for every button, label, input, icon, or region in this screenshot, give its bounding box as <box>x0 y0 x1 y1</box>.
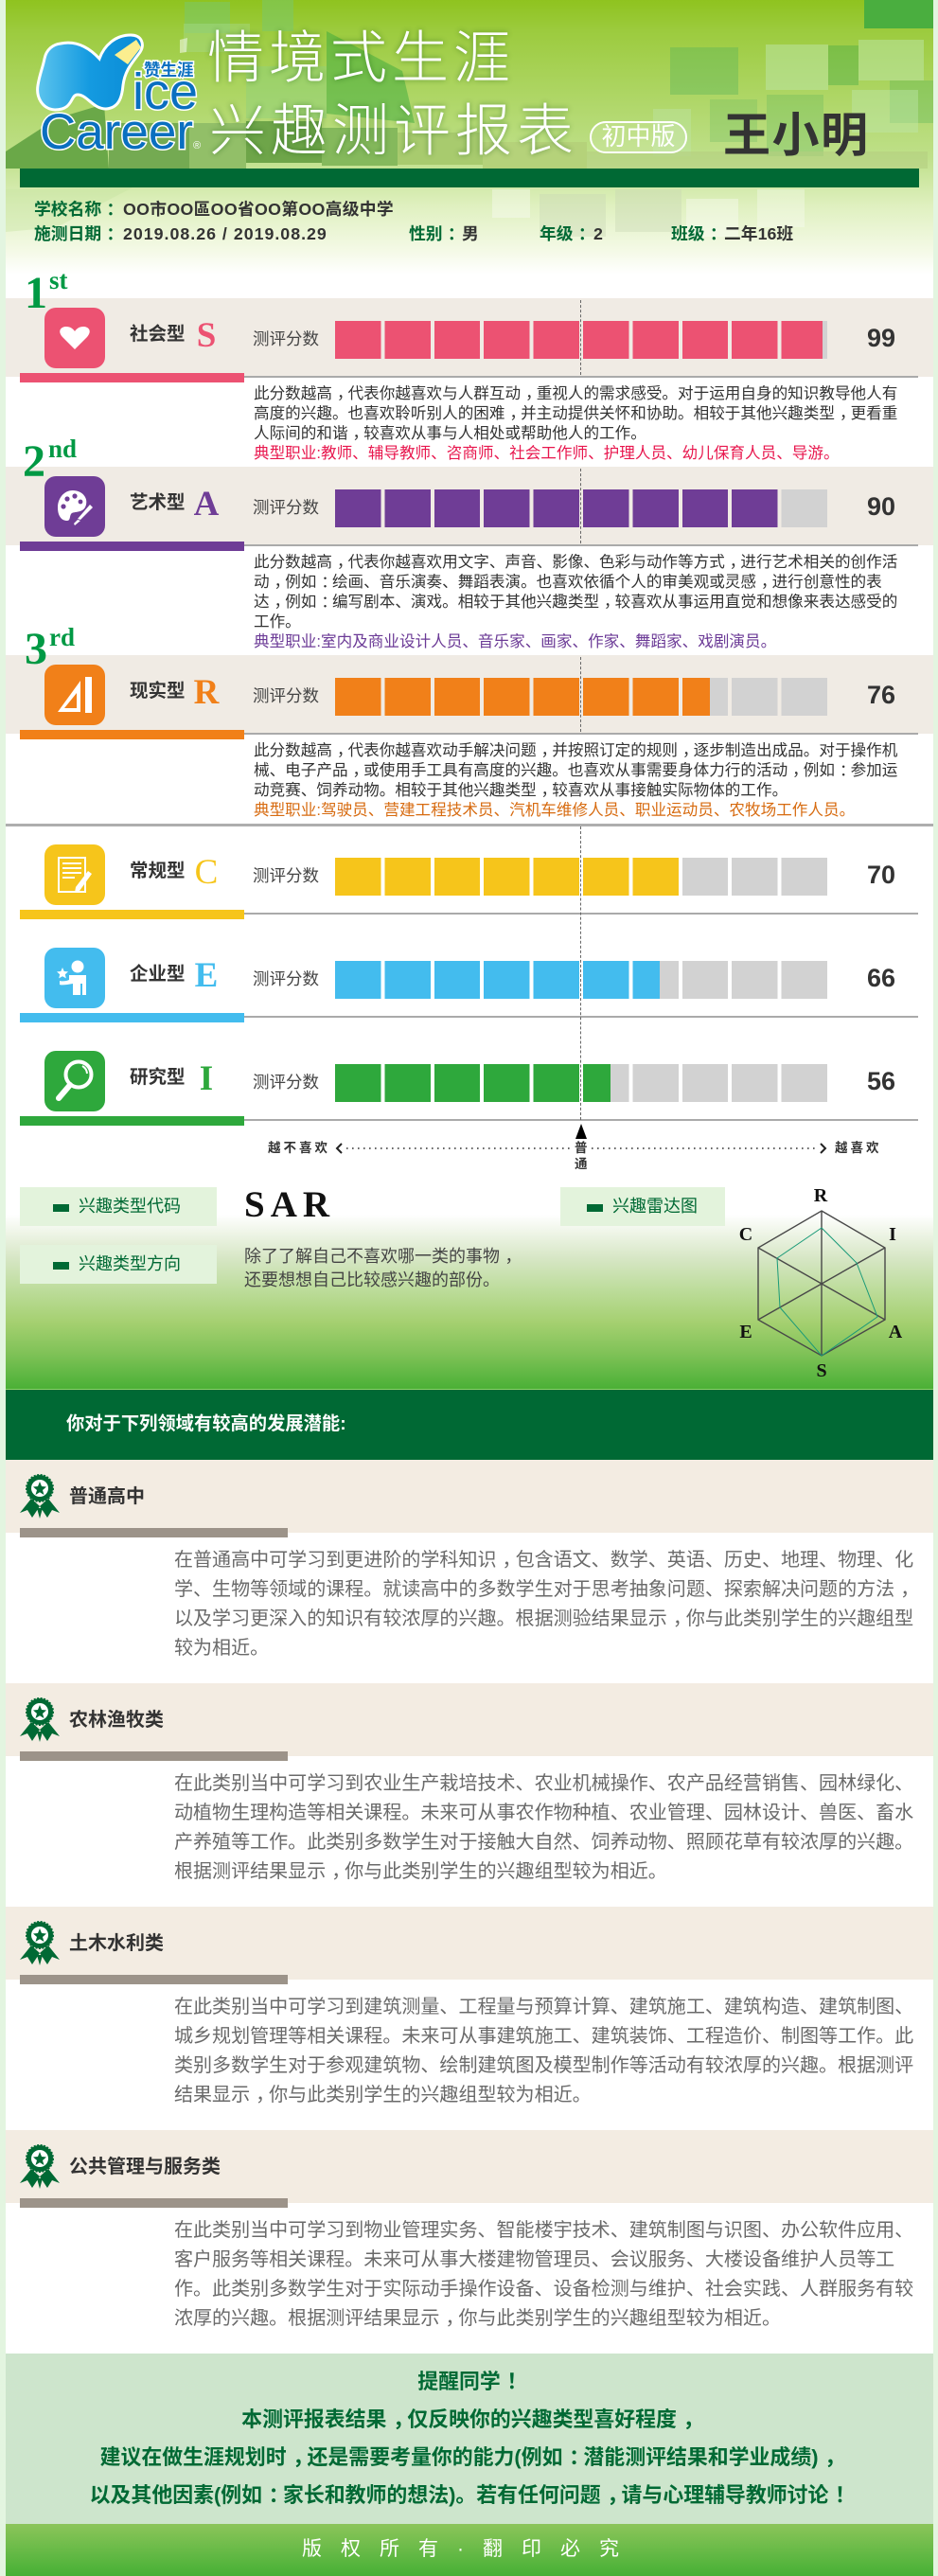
description: 人际间的和谐 ，较喜欢从事与人相处或帮助他人的工作。 <box>254 424 646 442</box>
description: 此分数越高 ，代表你越喜欢用文字、声音、影像、色彩与动作等方式 ，进行艺术相关的创作活 <box>254 553 897 571</box>
description: 达 ，例如 ：编写剧本、演戏。相较于其他兴趣类型 ，较喜欢从事运用直觉和想像来表达感受的 <box>254 593 897 611</box>
direction text <box>244 1247 522 1289</box>
panel text <box>174 1996 913 2105</box>
logo: Nice Career: ® <box>193 140 201 151</box>
score value: 56 <box>867 1067 895 1095</box>
title line 2: 兴趣测评报表 <box>209 99 578 163</box>
panel: civil engineering <box>6 1907 933 2130</box>
student info: 班级 ： <box>671 224 727 243</box>
rank badge 3rd: rd <box>49 623 75 651</box>
reminder panel: 本测评报表结果 ，仅反映你的兴趣类型喜好程度 ， <box>241 2407 703 2431</box>
type letter: A <box>194 485 219 524</box>
header banner <box>6 0 933 275</box>
description: 动 ，例如 ：绘画、音乐演奏、舞蹈表演。也喜欢依循个人的审美观或灵感 ，进行创意性的表 <box>254 573 882 591</box>
panel: social type S <box>6 298 933 467</box>
score label: 测评分数 <box>253 969 319 988</box>
gradient background: summary area <box>6 1215 933 1390</box>
panel: conventional type C <box>20 844 918 919</box>
student name: 王小明 <box>723 109 869 162</box>
panel text: 在此类别当中可学习到建筑测量、工程量与预算计算、建筑施工、建筑构造、建筑制图、 <box>174 1997 913 2017</box>
scale axis: dislike to like: 越不喜欢 <box>268 1141 330 1155</box>
student info: 男 <box>462 224 479 243</box>
score value: 90 <box>867 492 895 521</box>
type letter: C <box>195 853 218 892</box>
description <box>254 553 897 650</box>
panel: general high school <box>6 1460 933 1683</box>
panel title: 普通高中 <box>69 1486 145 1507</box>
scale axis: dislike to like: 越喜欢 <box>835 1141 882 1155</box>
reminder panel <box>6 2354 933 2524</box>
legend: interest code: 兴趣类型代码 <box>79 1197 181 1216</box>
student info: 2 <box>593 224 603 243</box>
type name: 艺术型 <box>130 492 186 513</box>
rank badge 1st: st <box>49 266 68 294</box>
panel text <box>174 2219 913 2329</box>
panel: realistic type R <box>6 655 933 824</box>
code value SAR: SAR <box>244 1184 335 1225</box>
rank badge 2nd: nd <box>48 435 77 463</box>
description <box>254 741 897 819</box>
logo: Nice Career: ice <box>133 63 198 120</box>
type letter: R <box>194 673 219 712</box>
icon: heart <box>44 308 105 368</box>
radar chart: A <box>889 1322 903 1342</box>
panel text: 在此类别当中可学习到物业管理实务、智能楼宇技术、建筑制图与识图、办公软件应用、 <box>174 2220 913 2241</box>
reminder panel: 提醒同学 ！ <box>417 2370 527 2393</box>
legend: radar chart <box>560 1187 725 1226</box>
icon: person with star <box>44 948 105 1008</box>
reminder panel: 建议在做生涯规划时 ，还是需要考量你的能力(例如 ：潜能测评结果和学业成绩) ， <box>100 2445 845 2469</box>
score bar 70 <box>335 858 827 896</box>
section heading band <box>6 1390 933 1460</box>
edition pill <box>590 121 687 153</box>
scale axis: dislike to like <box>268 1124 882 1171</box>
section heading: 你对于下列领域有较高的发展潜能: <box>66 1414 346 1434</box>
legend: interest code <box>20 1187 217 1226</box>
description: 动竞赛、饲养动物。相较于其他兴趣类型 ，较喜欢从事接触实际物体的工作。 <box>254 781 788 799</box>
score label: 测评分数 <box>253 498 319 517</box>
panel text: 学、生物等领域的课程。就读高中的多数学生对于思考抽象问题、探索解决问题的方法 ， <box>174 1579 919 1600</box>
panel: agriculture <box>6 1683 933 1907</box>
rank badge 1st: 1 <box>25 268 47 318</box>
score bar 99 <box>335 321 827 359</box>
icon: ribbon badge <box>20 1697 60 1742</box>
direction text: 除了了解自己不喜欢哪一类的事物 ， <box>244 1247 522 1266</box>
legend: interest direction <box>20 1245 217 1284</box>
score bar 66 <box>335 961 827 999</box>
panel text: 类别多数学生对于参观建筑物、绘制建筑图及模型制作等活动有较浓厚的兴趣。根据测评 <box>174 2055 913 2076</box>
rank badge 2nd <box>23 435 77 487</box>
student info: 学校名称 ： <box>34 200 123 219</box>
score value: 70 <box>867 861 895 889</box>
icon: notepad <box>44 844 105 905</box>
description: 典型职业:教师、辅导教师、咨商师、社会工作师、护理人员、幼儿保育人员、导游。 <box>254 444 840 462</box>
radar chart: S <box>816 1360 827 1381</box>
description: 此分数越高 ，代表你越喜欢与人群互动 ，重视人的需求感受。对于运用自身的知识教导他人有 <box>254 384 897 402</box>
description: 工作。 <box>254 613 301 631</box>
panel text: 浓厚的兴趣。根据测评结果显示 ，你与此类别学生的兴趣组型较为相近。 <box>174 2308 781 2329</box>
icon: ribbon badge <box>20 2144 60 2189</box>
panel text: 动植物生理构造等相关课程。未来可从事农作物种植、农业管理、园林设计、兽医、畜水 <box>174 1803 913 1823</box>
score value: 99 <box>867 324 895 352</box>
icon: magnifier <box>44 1051 105 1111</box>
student info: OO市OO區OO省OO第OO高级中学 <box>123 200 394 219</box>
panel text: 城乡规划管理等相关课程。未来可从事建筑施工、建筑装饰、工程造价、制图等工作。此 <box>174 2026 913 2047</box>
type name: 常规型 <box>130 861 186 881</box>
score label: 测评分数 <box>253 686 319 705</box>
panel title: 土木水利类 <box>69 1933 164 1954</box>
panel text: 作。此类别多数学生对于实际动手操作设备、设备检测与维护、社会实践、人群服务有较 <box>174 2279 913 2300</box>
panel title: 农林渔牧类 <box>69 1710 164 1731</box>
radar chart: R <box>814 1185 828 1206</box>
description: 典型职业:驾驶员、营建工程技术员、汽机车维修人员、职业运动员、农牧场工作人员。 <box>254 801 855 819</box>
description: 此分数越高 ，代表你越喜欢动手解决问题 ，并按照订定的规则 ，逐步制造出成品。对于操作机 <box>254 741 897 759</box>
panel text: 在普通高中可学习到更进阶的学科知识 ，包含语文、数学、英语、历史、地理、物理、化 <box>174 1550 913 1571</box>
footer copyright <box>6 2524 933 2576</box>
scale axis: dislike to like: 普 <box>575 1141 587 1155</box>
title line 1: 情境式生涯 <box>207 27 515 90</box>
type name: 企业型 <box>130 964 186 985</box>
panel text: 根据测评结果显示 ，你与此类别学生的兴趣组型较为相近。 <box>174 1861 667 1882</box>
icon: palette <box>44 476 105 537</box>
panel text: 在此类别当中可学习到农业生产栽培技术、农业机械操作、农产品经营销售、园林绿化、 <box>174 1773 913 1794</box>
radar chart <box>739 1185 903 1381</box>
description: 典型职业:室内及商业设计人员、音乐家、画家、作家、舞蹈家、戏剧演员。 <box>254 632 776 650</box>
logo: Nice Career <box>36 34 201 151</box>
legend: interest direction: 兴趣类型方向 <box>79 1254 181 1273</box>
student info: 性别 ： <box>409 224 465 243</box>
student info: 二年16班 <box>724 224 793 243</box>
type letter: E <box>195 956 218 995</box>
panel text: 产养殖等工作。此类别多数学生对于接触大自然、饲养动物、照顾花草有较浓厚的兴趣。 <box>174 1832 913 1853</box>
radar chart: C <box>739 1224 752 1245</box>
panel text <box>174 1549 919 1659</box>
score value: 66 <box>867 964 895 992</box>
student info: 施测日期 ： <box>34 224 123 243</box>
panel: public management <box>6 2130 933 2354</box>
student info: 2019.08.26 / 2019.08.29 <box>123 224 327 243</box>
student info <box>34 200 793 243</box>
panel text: 较为相近。 <box>174 1638 269 1659</box>
type name: 现实型 <box>130 681 186 702</box>
rank badge 1st <box>25 266 68 318</box>
scale axis: dislike to like: 通 <box>575 1157 587 1171</box>
icon: ribbon badge <box>20 1921 60 1965</box>
edition pill: 初中版 <box>601 122 676 151</box>
type letter: I <box>200 1059 213 1098</box>
score label: 测评分数 <box>253 866 319 885</box>
icon: ribbon badge <box>20 1474 60 1519</box>
type name: 社会型 <box>130 324 186 345</box>
description: 械、电子产品 ，或使用手工具有高度的兴趣。也喜欢从事需要身体力行的活动 ，例如 ：参加运 <box>254 761 897 779</box>
type letter: S <box>197 316 216 355</box>
panel text: 以及学习更深入的知识有较浓厚的兴趣。根据测验结果显示 ，你与此类别学生的兴趣组型 <box>174 1608 913 1629</box>
score value: 76 <box>867 681 895 709</box>
panel title: 公共管理与服务类 <box>69 2157 221 2177</box>
reminder panel: 以及其他因素(例如 ：家长和教师的想法)。若有任何问题 ，请与心理辅导教师讨论 ！ <box>90 2483 856 2507</box>
icon: set square and ruler <box>44 665 105 725</box>
panel text <box>174 1772 913 1882</box>
direction text: 还要想想自己比较感兴趣的部份。 <box>244 1270 500 1289</box>
panel text: 结果显示 ，你与此类别学生的兴趣组型较为相近。 <box>174 2085 592 2105</box>
score label: 测评分数 <box>253 329 319 348</box>
type name: 研究型 <box>130 1067 186 1088</box>
description <box>254 384 897 462</box>
radar chart: E <box>739 1322 752 1342</box>
rank badge 3rd: 3 <box>25 624 47 674</box>
score bar 76 <box>335 678 827 716</box>
panel text: 客户服务等相关课程。未来可从事大楼建物管理员、会议服务、大楼设备维护人员等工 <box>174 2249 894 2270</box>
radar chart: I <box>889 1224 896 1245</box>
panel: investigative type I <box>20 1051 918 1126</box>
score bar 56 <box>335 1064 827 1102</box>
logo: Nice Career: 赞生涯 <box>144 58 193 81</box>
rank badge 2nd: 2 <box>23 436 45 487</box>
description: 高度的兴趣。也喜欢聆听别人的困难 ，并主动提供关怀和协助。相较于其他兴趣类型 ，更看重 <box>254 404 897 422</box>
panel: artistic type A <box>6 467 933 655</box>
student info: 年级 ： <box>540 224 595 243</box>
score label: 测评分数 <box>253 1073 319 1092</box>
dark green header bar <box>20 169 919 187</box>
panel: enterprising type E <box>20 948 918 1022</box>
footer copyright: 版权所有·翻印必究 <box>302 2538 638 2560</box>
score bar 90 <box>335 489 827 527</box>
legend: radar chart: 兴趣雷达图 <box>612 1197 698 1216</box>
rank badge 3rd <box>25 623 75 674</box>
